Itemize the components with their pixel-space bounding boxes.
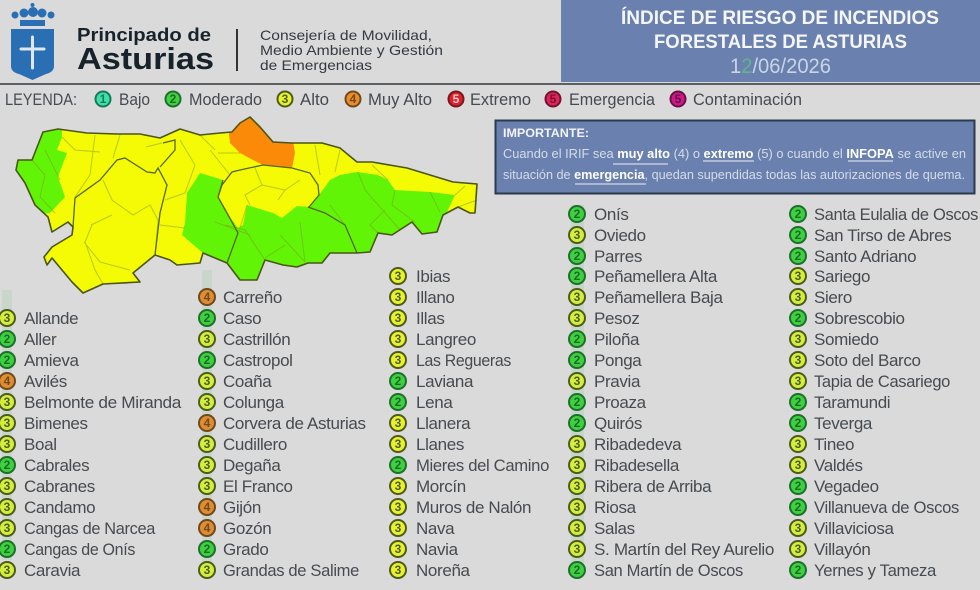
row: Valdés: 3 <box>795 458 802 472</box>
row: Villayón: Villayón <box>814 540 870 559</box>
row: Onís: 2 <box>574 207 581 221</box>
row: Peñamellera Baja: 3 <box>574 290 581 304</box>
legend item: Alto: 3 <box>282 92 289 106</box>
date: 12/06/2026 <box>730 55 831 78</box>
row: Cangas de Onís: 2 <box>4 542 11 556</box>
row: Coaña: Coaña <box>223 372 272 391</box>
row: Amieva: 2 <box>4 353 11 367</box>
row: Corvera de Asturias: Corvera de Asturias <box>223 414 366 433</box>
row: Quirós <box>569 414 642 433</box>
row: Langreo <box>390 330 476 349</box>
row: Gijón: Gijón <box>223 498 261 517</box>
row: Noreña: Noreña <box>416 561 471 580</box>
row: Degaña <box>199 456 281 475</box>
logo: Principado de Asturias <box>11 3 443 80</box>
row: Piloña <box>569 330 640 349</box>
row: Laviana: Laviana <box>416 372 474 391</box>
legend item: Moderado: Moderado <box>189 90 262 109</box>
row: Allande <box>0 309 78 328</box>
row: Siero <box>790 288 852 307</box>
legend item: Bajo: 1 <box>100 92 107 106</box>
legend item: Alto <box>278 90 329 109</box>
legend item: Emergencia: Emergencia <box>569 90 656 109</box>
row: Castropol: Castropol <box>223 351 293 370</box>
row: Llanes: 3 <box>395 437 402 451</box>
row: Riosa: Riosa <box>594 498 637 517</box>
row: Muros de Nalón: 3 <box>395 500 402 514</box>
row: Parres <box>569 247 642 266</box>
legend item: Moderado: 2 <box>170 92 177 106</box>
legend item: Bajo <box>96 90 150 109</box>
row: Belmonte de Miranda: Belmonte de Miranda <box>24 393 182 412</box>
row: Yernes y Tameza: 2 <box>795 563 802 577</box>
row: Sariego: 3 <box>795 269 802 283</box>
row: Soto del Barco: Soto del Barco <box>814 351 921 370</box>
title panel <box>561 0 980 82</box>
row: Caravia <box>0 561 81 580</box>
row: San Tirso de Abres: 2 <box>795 228 802 242</box>
row: Valdés <box>790 456 863 475</box>
row: Coaña <box>199 372 272 391</box>
row: Somiedo: 3 <box>795 332 802 346</box>
municipality list column 1 <box>0 309 182 580</box>
row: Castrillón: Castrillón <box>223 330 290 349</box>
row: Ribadedeva: Ribadedeva <box>594 435 682 454</box>
row: Las Regueras: Las Regueras <box>416 351 511 370</box>
row: Siero: 3 <box>795 290 802 304</box>
legend item: Contaminación: Contaminación <box>693 90 802 109</box>
row: Coaña: 3 <box>204 374 211 388</box>
row: Piloña: Piloña <box>594 330 640 349</box>
row: Llanes <box>390 435 464 454</box>
row: Allande: Allande <box>24 309 78 328</box>
row: Castrillón: 3 <box>204 332 211 346</box>
legend item: Bajo: Bajo <box>119 90 150 109</box>
row: Nava: 3 <box>395 521 402 535</box>
row: Illano: 3 <box>395 290 402 304</box>
row: Las Regueras: 3 <box>395 353 402 367</box>
row: Caso: Caso <box>223 309 261 328</box>
row: Cudillero: 3 <box>204 437 211 451</box>
row: Ponga: 2 <box>574 353 581 367</box>
map: green central and east zone <box>182 172 455 280</box>
row: Illas: 3 <box>395 311 402 325</box>
legend <box>5 90 802 109</box>
row: Muros de Nalón: Muros de Nalón <box>416 498 531 517</box>
row: Ponga <box>569 351 642 370</box>
municipality list column 2 <box>199 288 366 580</box>
row: Amieva: Amieva <box>24 351 79 370</box>
row: Illano: Illano <box>416 288 455 307</box>
row: Salas: 3 <box>574 521 581 535</box>
row: Salas: Salas <box>594 519 635 538</box>
map: green west zone <box>16 130 67 214</box>
row: S. Martín del Rey Aurelio: S. Martín del Rey Aurelio <box>594 540 774 559</box>
row: Degaña: Degaña <box>223 456 281 475</box>
row: Illano <box>390 288 455 307</box>
row: San Martín de Oscos: San Martín de Oscos <box>594 561 743 580</box>
row: Langreo: Langreo <box>416 330 476 349</box>
row: Proaza <box>569 393 647 412</box>
row: Caravia: Caravia <box>24 561 81 580</box>
row: Ribera de Arriba: 3 <box>574 479 581 493</box>
row: Piloña: 2 <box>574 332 581 346</box>
row: Onís: Onís <box>594 205 629 224</box>
row: Bimenes: 3 <box>4 416 11 430</box>
row: Avilés <box>0 372 67 391</box>
row: Oviedo: Oviedo <box>594 226 646 245</box>
row: Lena: 2 <box>395 395 402 409</box>
row: Boal: 3 <box>4 437 11 451</box>
row: Mieres del Camino: Mieres del Camino <box>416 456 549 475</box>
row: Pravia: 3 <box>574 374 581 388</box>
row: Teverga: Teverga <box>814 414 873 433</box>
title <box>621 7 939 53</box>
row: Pravia: Pravia <box>594 372 641 391</box>
row: Ribadesella: 3 <box>574 458 581 472</box>
row: Ribadesella: Ribadesella <box>594 456 680 475</box>
row: Grado: Grado <box>223 540 268 559</box>
row: Mieres del Camino: 2 <box>395 458 402 472</box>
row: Cabranes: Cabranes <box>24 477 95 496</box>
row: Caso: 2 <box>204 311 211 325</box>
row: Sobrescobio: 2 <box>795 311 802 325</box>
row: Proaza: Proaza <box>594 393 647 412</box>
row: Noreña: 3 <box>395 563 402 577</box>
row: Ibias: Ibias <box>416 267 450 286</box>
row: Llanes: Llanes <box>416 435 464 454</box>
row: S. Martín del Rey Aurelio: 3 <box>574 542 581 556</box>
row: Illas: Illas <box>416 309 444 328</box>
row: Vegadeo: 2 <box>795 479 802 493</box>
row: Proaza: 2 <box>574 395 581 409</box>
row: Degaña: 3 <box>204 458 211 472</box>
row: Gijón: 4 <box>204 500 211 514</box>
legend item: Alto: Alto <box>300 90 329 109</box>
row: Illas <box>390 309 444 328</box>
row: Avilés: 4 <box>4 374 11 388</box>
row: Morcín <box>390 477 466 496</box>
row: Yernes y Tameza: Yernes y Tameza <box>814 561 937 580</box>
row: Tineo: Tineo <box>814 435 854 454</box>
row: Ibias <box>390 267 450 286</box>
row: Parres: Parres <box>594 247 642 266</box>
row: Belmonte de Miranda: 3 <box>4 395 11 409</box>
row: Castropol: 2 <box>204 353 211 367</box>
legend item: Extremo: Extremo <box>470 90 531 109</box>
row: Pesoz <box>569 309 640 328</box>
row: Quirós: 2 <box>574 416 581 430</box>
row: Ribera de Arriba: Ribera de Arriba <box>594 477 712 496</box>
row: Avilés: Avilés <box>24 372 67 391</box>
row: Peñamellera Alta: 2 <box>574 269 581 283</box>
row: Cabranes: 3 <box>4 479 11 493</box>
map of Asturias <box>15 116 478 294</box>
row: Parres: 2 <box>574 249 581 263</box>
row: Villanueva de Oscos: 2 <box>795 500 802 514</box>
row: Villanueva de Oscos: Villanueva de Oscos <box>814 498 959 517</box>
logo wordmark <box>77 25 214 76</box>
row: Gozón: 4 <box>204 521 211 535</box>
department name: Consejería de Movilidad, <box>260 27 432 43</box>
row: Gozón: Gozón <box>223 519 271 538</box>
row: Santo Adriano: Santo Adriano <box>814 247 916 266</box>
row: Cabrales: Cabrales <box>24 456 89 475</box>
map: orange zone <box>228 118 295 168</box>
row: Colunga: 3 <box>204 395 211 409</box>
callout: importante: Cuando el IRIF sea muy alto (4) o extremo (5) o cuando el INFOPA se active en <box>503 147 966 161</box>
department name: de Emergencias <box>260 57 372 73</box>
row: Cudillero: Cudillero <box>223 435 287 454</box>
row: San Martín de Oscos: 2 <box>574 563 581 577</box>
row: Tapia de Casariego: Tapia de Casariego <box>814 372 950 391</box>
row: Tineo: 3 <box>795 437 802 451</box>
row: Ribadedeva: 3 <box>574 437 581 451</box>
title: ÍNDICE DE RIESGO DE INCENDIOS <box>621 7 939 29</box>
municipality list column 5 <box>790 205 978 580</box>
row: Colunga: Colunga <box>223 393 285 412</box>
row: Pesoz: 3 <box>574 311 581 325</box>
row: Oviedo: 3 <box>574 228 581 242</box>
legend item: Muy Alto: Muy Alto <box>368 90 432 109</box>
row: Pesoz: Pesoz <box>594 309 640 328</box>
row: Tineo <box>790 435 854 454</box>
department name <box>260 27 443 73</box>
logo wordmark: Principado de <box>77 25 211 45</box>
row: Lena: Lena <box>416 393 453 412</box>
row: El Franco: El Franco <box>223 477 293 496</box>
legend: LEYENDA: <box>5 90 77 109</box>
row: Langreo: 3 <box>395 332 402 346</box>
row: Riosa: 3 <box>574 500 581 514</box>
row: Laviana: 2 <box>395 374 402 388</box>
row: Nava: Nava <box>416 519 455 538</box>
row: Caravia: 3 <box>4 563 11 577</box>
row: Cabrales: 2 <box>4 458 11 472</box>
row: Salas <box>569 519 635 538</box>
row: Santa Eulalia de Oscos: 2 <box>795 207 802 221</box>
row: Somiedo: Somiedo <box>814 330 879 349</box>
row: Cangas de Onís: Cangas de Onís <box>24 540 135 559</box>
row: Llanera <box>390 414 471 433</box>
row: Teverga: 2 <box>795 416 802 430</box>
row: Grandas de Salime: Grandas de Salime <box>223 561 359 580</box>
row: Aller: Aller <box>24 330 57 349</box>
row: Pravia <box>569 372 641 391</box>
row: Laviana <box>390 372 474 391</box>
row: Noreña <box>390 561 471 580</box>
row: Navia: 3 <box>395 542 402 556</box>
row: San Tirso de Abres: San Tirso de Abres <box>814 226 951 245</box>
row: Gozón <box>199 519 271 538</box>
row: Villaviciosa: Villaviciosa <box>814 519 894 538</box>
row: Santa Eulalia de Oscos: Santa Eulalia de Oscos <box>814 205 978 224</box>
row: Sariego: Sariego <box>814 267 870 286</box>
row: Valdés: Valdés <box>814 456 863 475</box>
row: Siero: Siero <box>814 288 852 307</box>
row: Grado <box>199 540 268 559</box>
row: Allande: 3 <box>4 311 11 325</box>
row: El Franco: 3 <box>204 479 211 493</box>
row: Llanera: Llanera <box>416 414 471 433</box>
row: Morcín: Morcín <box>416 477 466 496</box>
row: Villaviciosa: 3 <box>795 521 802 535</box>
icon: coat of arms shield <box>11 3 54 80</box>
legend item: Emergencia: 5 <box>550 92 557 106</box>
callout: importante <box>496 120 974 194</box>
legend item: Extremo: 5 <box>453 92 460 106</box>
row: Cangas de Narcea: Cangas de Narcea <box>24 519 156 538</box>
row: Bimenes: Bimenes <box>24 414 88 433</box>
row: Navia <box>390 540 459 559</box>
row: Peñamellera Baja: Peñamellera Baja <box>594 288 723 307</box>
municipality list column 3 <box>390 267 549 580</box>
row: Amieva <box>0 351 79 370</box>
row: Caso <box>199 309 261 328</box>
row: Carreño: 4 <box>204 290 211 304</box>
row: Carreño: Carreño <box>223 288 282 307</box>
municipality list column 4 <box>569 205 774 580</box>
row: Ibias: 3 <box>395 269 402 283</box>
title: FORESTALES DE ASTURIAS <box>654 32 907 53</box>
row: Aller: 2 <box>4 332 11 346</box>
row: Soto del Barco: 3 <box>795 353 802 367</box>
row: Aller <box>0 330 57 349</box>
row: Quirós: Quirós <box>594 414 642 433</box>
row: Santo Adriano: 2 <box>795 249 802 263</box>
row: Taramundi: Taramundi <box>814 393 890 412</box>
row: Corvera de Asturias: 4 <box>204 416 211 430</box>
row: Ponga: Ponga <box>594 351 642 370</box>
row: Boal <box>0 435 57 454</box>
row: Lena <box>390 393 453 412</box>
row: Gijón <box>199 498 261 517</box>
row: Taramundi: 2 <box>795 395 802 409</box>
row: Villayón: 3 <box>795 542 802 556</box>
callout: importante: IMPORTANTE: <box>503 128 589 140</box>
row: Tapia de Casariego: 3 <box>795 374 802 388</box>
row: Candamo: Candamo <box>24 498 95 517</box>
row: Grado: 2 <box>204 542 211 556</box>
row: Grandas de Salime: 3 <box>204 563 211 577</box>
row: Peñamellera Alta: Peñamellera Alta <box>594 267 718 286</box>
row: Navia: Navia <box>416 540 459 559</box>
row: Riosa <box>569 498 637 517</box>
row: Vegadeo: Vegadeo <box>814 477 879 496</box>
row: Sobrescobio: Sobrescobio <box>814 309 905 328</box>
logo wordmark: Asturias <box>77 41 214 76</box>
row: Onís <box>569 205 629 224</box>
callout: importante: situación de emergencia, quedan supendidas todas las autorizaciones de quema. <box>503 168 965 182</box>
row: Morcín: 3 <box>395 479 402 493</box>
row: Cangas de Narcea: 3 <box>4 521 11 535</box>
legend item: Muy Alto: 4 <box>350 92 357 106</box>
row: Llanera: 3 <box>395 416 402 430</box>
row: Teverga <box>790 414 873 433</box>
row: Nava <box>390 519 455 538</box>
legend item: Contaminación: 5 <box>675 92 682 106</box>
row: Oviedo <box>569 226 646 245</box>
department name: Medio Ambiente y Gestión <box>260 42 443 58</box>
row: Candamo: 3 <box>4 500 11 514</box>
row: Boal: Boal <box>24 435 57 454</box>
